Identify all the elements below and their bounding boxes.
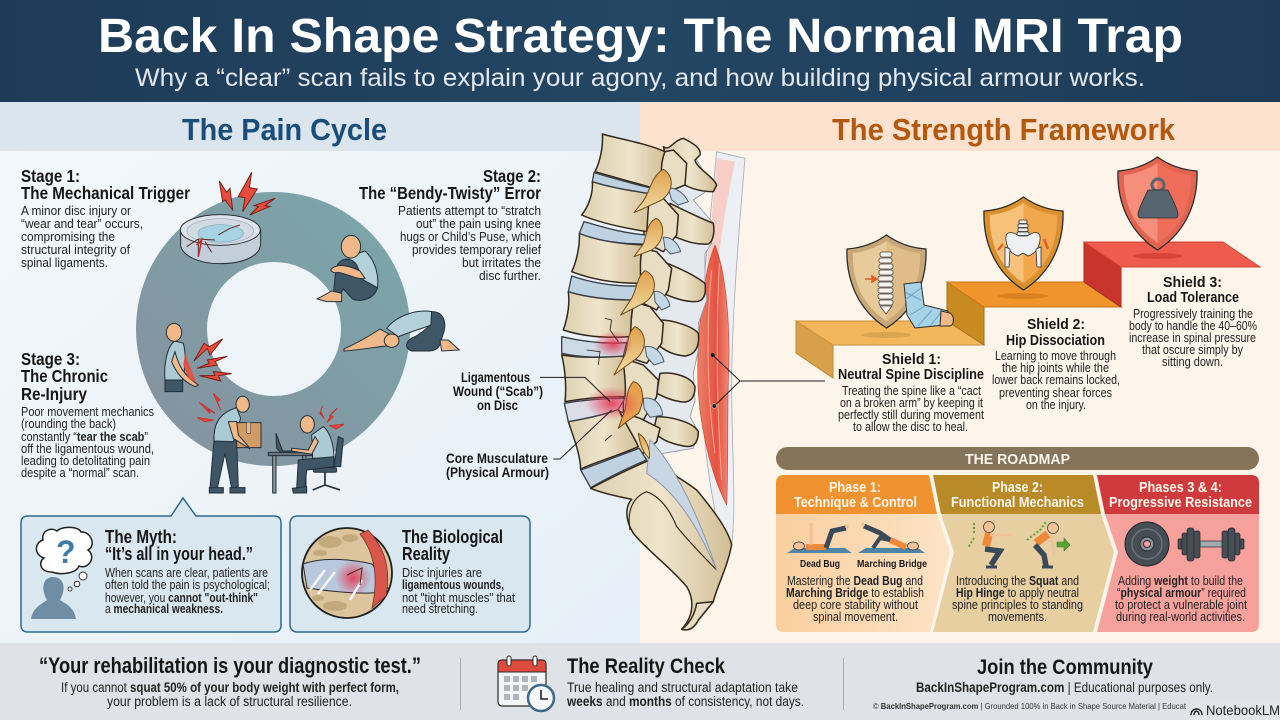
footer: the reality check (566, 655, 804, 709)
text: shield 3: Shield 3: (1163, 274, 1222, 291)
icon: squat (968, 522, 1012, 567)
watermark: NotebookLM (1186, 701, 1280, 720)
icon: person in child's pose (344, 311, 459, 351)
callout: the biological reality: Disc injuries are (402, 566, 482, 580)
label: ligamentous wound: Ligamentous (461, 370, 530, 385)
text: stage 2: Stage 2: (483, 166, 541, 186)
heading: the strength framework: The Strength Framework (832, 112, 1176, 147)
wound glow and cracks (585, 318, 638, 441)
text: shield 2: on the injury. (1026, 398, 1086, 412)
text: shield 2: Shield 2: (1027, 316, 1085, 333)
label: core musculature: Core Musculature (446, 451, 548, 466)
panel: the strength framework (640, 102, 1280, 643)
text: phase 1 body: deep core stability without (793, 598, 918, 612)
callout: the biological reality: Reality (402, 543, 451, 564)
text: stage 3: off the ligamentous wound, (21, 442, 154, 456)
icon: weight plate (1125, 522, 1169, 566)
icon: person hugging knees (317, 235, 378, 302)
text: phase 1 body: spinal movement. (813, 610, 898, 624)
text: phase 3 and 4 body: “physical armour” required (1117, 586, 1246, 600)
text: stage 3: Stage 3: (21, 349, 80, 369)
text: stage 2: Patients attempt to “stratch (398, 204, 541, 218)
text: phase 3 and 4 body: Adding weight to build the (1118, 574, 1243, 588)
posterior spinous processes (653, 138, 717, 447)
roadmap phase 3 and 4: Progressive Resistance (1109, 494, 1252, 511)
text: stage 2: but irritates the (462, 256, 541, 270)
text: shield 3: sitting down. (1162, 355, 1223, 369)
footer: join the community (873, 656, 1213, 711)
text: shield 2 (992, 316, 1120, 412)
footer: join the community: Join the Community (977, 656, 1153, 679)
callout: the myth: however, you cannot "out-think" (105, 591, 258, 605)
text: stage 1: Stage 1: (21, 166, 80, 186)
callout: the myth: When scans are clear, patients are (105, 566, 268, 580)
roadmap phase 1 (776, 475, 950, 632)
text: shield 3: that oscure simply by (1142, 343, 1244, 357)
roadmap phase 2: Phase 2: (992, 479, 1043, 496)
icon: thought cloud and silhouette (31, 527, 92, 619)
icon: shield 2 with pelvis (984, 197, 1063, 290)
text: shield 1: on a broken arm” by keeping it (840, 396, 983, 410)
roadmap phase 2 (933, 475, 1114, 632)
callout lines (540, 355, 825, 459)
text: shield 2: the hip joints while the (1002, 361, 1109, 375)
label: dead bug: Dead Bug (800, 558, 840, 570)
text: phase 3 and 4 body: during real-world activities. (1116, 610, 1245, 624)
text: stage 2: provides temporary relief (412, 243, 541, 257)
text: stage 3: Poor movement mechanics (21, 405, 154, 419)
footer: join the community: © BackInShapeProgram.com | Grounded 100% in Back in Shape Source Material | Educat (873, 701, 1187, 711)
icon: person holding lower back (165, 323, 232, 392)
text: shield 3 (1129, 274, 1257, 369)
text: stage 1: compromising the (21, 230, 115, 244)
text: phase 2 body: Introducing the Squat and (956, 574, 1079, 588)
text: shield 1: Shield 1: (882, 351, 941, 368)
roadmap phase 1: Phase 1: (829, 479, 881, 496)
text: phase 2 body: Hip Hinge to apply neutral (956, 586, 1079, 600)
text: stage 2 (359, 166, 541, 283)
text: shield 1: perfectly still during movement (838, 408, 984, 422)
roadmap phase 1: Technique & Control (794, 494, 917, 511)
label: core musculature: (Physical Armour) (446, 465, 549, 480)
text: shield 3: body to handle the 40–60% (1129, 319, 1257, 333)
text: shield 3: Progressively training the (1133, 307, 1253, 321)
icon: cracked disc with lightning (180, 172, 275, 264)
icon: shield 1 with spine and cast arm (847, 235, 953, 328)
text: phase 1 body (786, 574, 924, 624)
vertebral bodies (562, 134, 665, 469)
title: Back In Shape Strategy: The Normal MRI Trap (98, 10, 1183, 63)
text: stage 1: “wear and tear” occurs, (21, 217, 143, 231)
nerve roots (614, 169, 671, 458)
footer band (0, 643, 1280, 720)
icon: person hunched at desk (268, 406, 344, 493)
callout: the biological reality: need stretching. (402, 602, 478, 616)
text: stage 3 (21, 349, 154, 480)
sacrum (591, 461, 732, 630)
label: ligamentous wound: Wound (“Scab”) (453, 384, 543, 399)
label: marching bridge: Marching Bridge (857, 558, 927, 570)
text: stage 1: The Mechanical Trigger (21, 183, 190, 203)
cycle ring (136, 192, 410, 466)
text: phase 2 body (952, 574, 1083, 624)
pedicles and facets (620, 150, 687, 453)
text: phase 2 body: spine principles to standing (952, 598, 1083, 612)
footer: the reality check: True healing and structural adaptation take (567, 680, 798, 695)
text: shield 2: lower back remains locked, (992, 373, 1120, 387)
footer: diagnostic quote (39, 653, 421, 709)
callout: the biological reality: not "tight muscles" that (402, 591, 515, 605)
staircase (796, 242, 1260, 378)
roadmap phase 3 and 4: Phases 3 & 4: (1139, 479, 1222, 496)
text: phase 1 body: Mastering the Dead Bug and (787, 574, 923, 588)
posterior column backing (625, 140, 713, 463)
text: phase 1 body: Marching Bridge to establish (786, 586, 924, 600)
footer: diagnostic quote: If you cannot squat 50% of your body weight with perfect form, (61, 680, 399, 695)
icon: thought cloud and silhouette: ? (56, 534, 76, 570)
footer: join the community: BackInShapeProgram.com | Educational purposes only. (916, 680, 1213, 695)
text: phase 3 and 4 body: to protect a vulnerable joint (1115, 598, 1247, 612)
text: stage 2: The “Bendy-Twisty” Error (359, 183, 541, 203)
text: stage 3: constantly “tear the scab” (21, 430, 148, 444)
callout: the biological reality: The Biological (402, 526, 503, 547)
roadmap phase 3 and 4 (1097, 475, 1259, 632)
icon: dumbbell (1178, 528, 1244, 561)
roadmap phase 2: Functional Mechanics (951, 494, 1084, 511)
icon: marching bridge exercise (858, 523, 925, 553)
text: shield 2: Learning to move through (995, 349, 1116, 363)
icon: shield 3 with weight (1118, 157, 1197, 250)
callout: the biological reality (290, 516, 530, 632)
text: shield 1: Treating the spine like a “cact (842, 384, 981, 398)
callout: the myth: often told the pain is psychological; (105, 578, 270, 592)
text: stage 1: A minor disc injury or (21, 204, 131, 218)
footer: the reality check: weeks and months of consistency, not days. (566, 694, 804, 709)
text: stage 3: leading to detolitating pain (21, 454, 150, 468)
roadmap title bar: THE ROADMAP (965, 451, 1070, 468)
spine illustration (540, 134, 825, 630)
text: shield 2: preventing shear forces (999, 386, 1112, 400)
icon: dead bug exercise (787, 523, 852, 553)
text: stage 3: The Chronic (21, 366, 108, 386)
text: stage 2: disc further. (479, 269, 541, 283)
text: stage 3: despite a “normal” scan. (21, 466, 139, 480)
callout: the myth: “It’s all in your head.” (105, 543, 253, 564)
footer: diagnostic quote: “Your rehabilitation is your diagnostic test.” (39, 653, 421, 678)
footer: the reality check: The Reality Check (567, 655, 725, 678)
roadmap title bar (776, 447, 1259, 470)
label: core musculature (446, 451, 549, 480)
text: stage 1: structural integrity of (21, 243, 131, 257)
text: stage 2: hugs or Child’s Puse, which (400, 230, 541, 244)
text: shield 1: to allow the disc to heal. (853, 420, 968, 434)
header banner (0, 0, 1280, 102)
icon: calendar and clock (498, 656, 554, 711)
heading: the pain cycle: The Pain Cycle (182, 112, 387, 147)
text: stage 2: out” the pain using knee (416, 217, 541, 231)
text: shield 3: Load Tolerance (1147, 289, 1239, 306)
icon: person lifting a box (197, 393, 261, 493)
text: shield 2: Hip Dissociation (1006, 332, 1105, 349)
label: ligamentous wound: on Disc (477, 398, 518, 413)
text: phase 2 body: movements. (988, 610, 1047, 624)
text: stage 1: spinal ligaments. (21, 256, 108, 270)
icon: hip hinge (1027, 522, 1070, 567)
icon: disc wound close-up (302, 528, 392, 618)
text: shield 3: increase in spinal pressure (1129, 331, 1256, 345)
subtitle: Why a “clear” scan fails to explain your agony, and how building physical armour works. (135, 64, 1145, 92)
callout: the myth: a mechanical weakness. (105, 602, 223, 616)
panel: the pain cycle (0, 102, 640, 643)
callout: the biological reality: ligamentous wounds, (402, 578, 504, 592)
text: stage 3: (rounding the back) (21, 417, 116, 431)
callout: the myth: The Myth: (105, 526, 177, 547)
text: stage 1 (21, 166, 190, 270)
callout: the myth (21, 498, 281, 632)
text: shield 1: Neutral Spine Discipline (838, 366, 984, 383)
ligament and muscle strips (698, 152, 745, 545)
intervertebral discs (562, 173, 653, 488)
footer: diagnostic quote: your problem is a lack of structural resilience. (107, 694, 352, 709)
text: shield 1 (838, 351, 984, 434)
text: stage 3: Re-Injury (21, 384, 87, 404)
text: phase 3 and 4 body (1115, 574, 1247, 624)
label: ligamentous wound (453, 370, 543, 413)
